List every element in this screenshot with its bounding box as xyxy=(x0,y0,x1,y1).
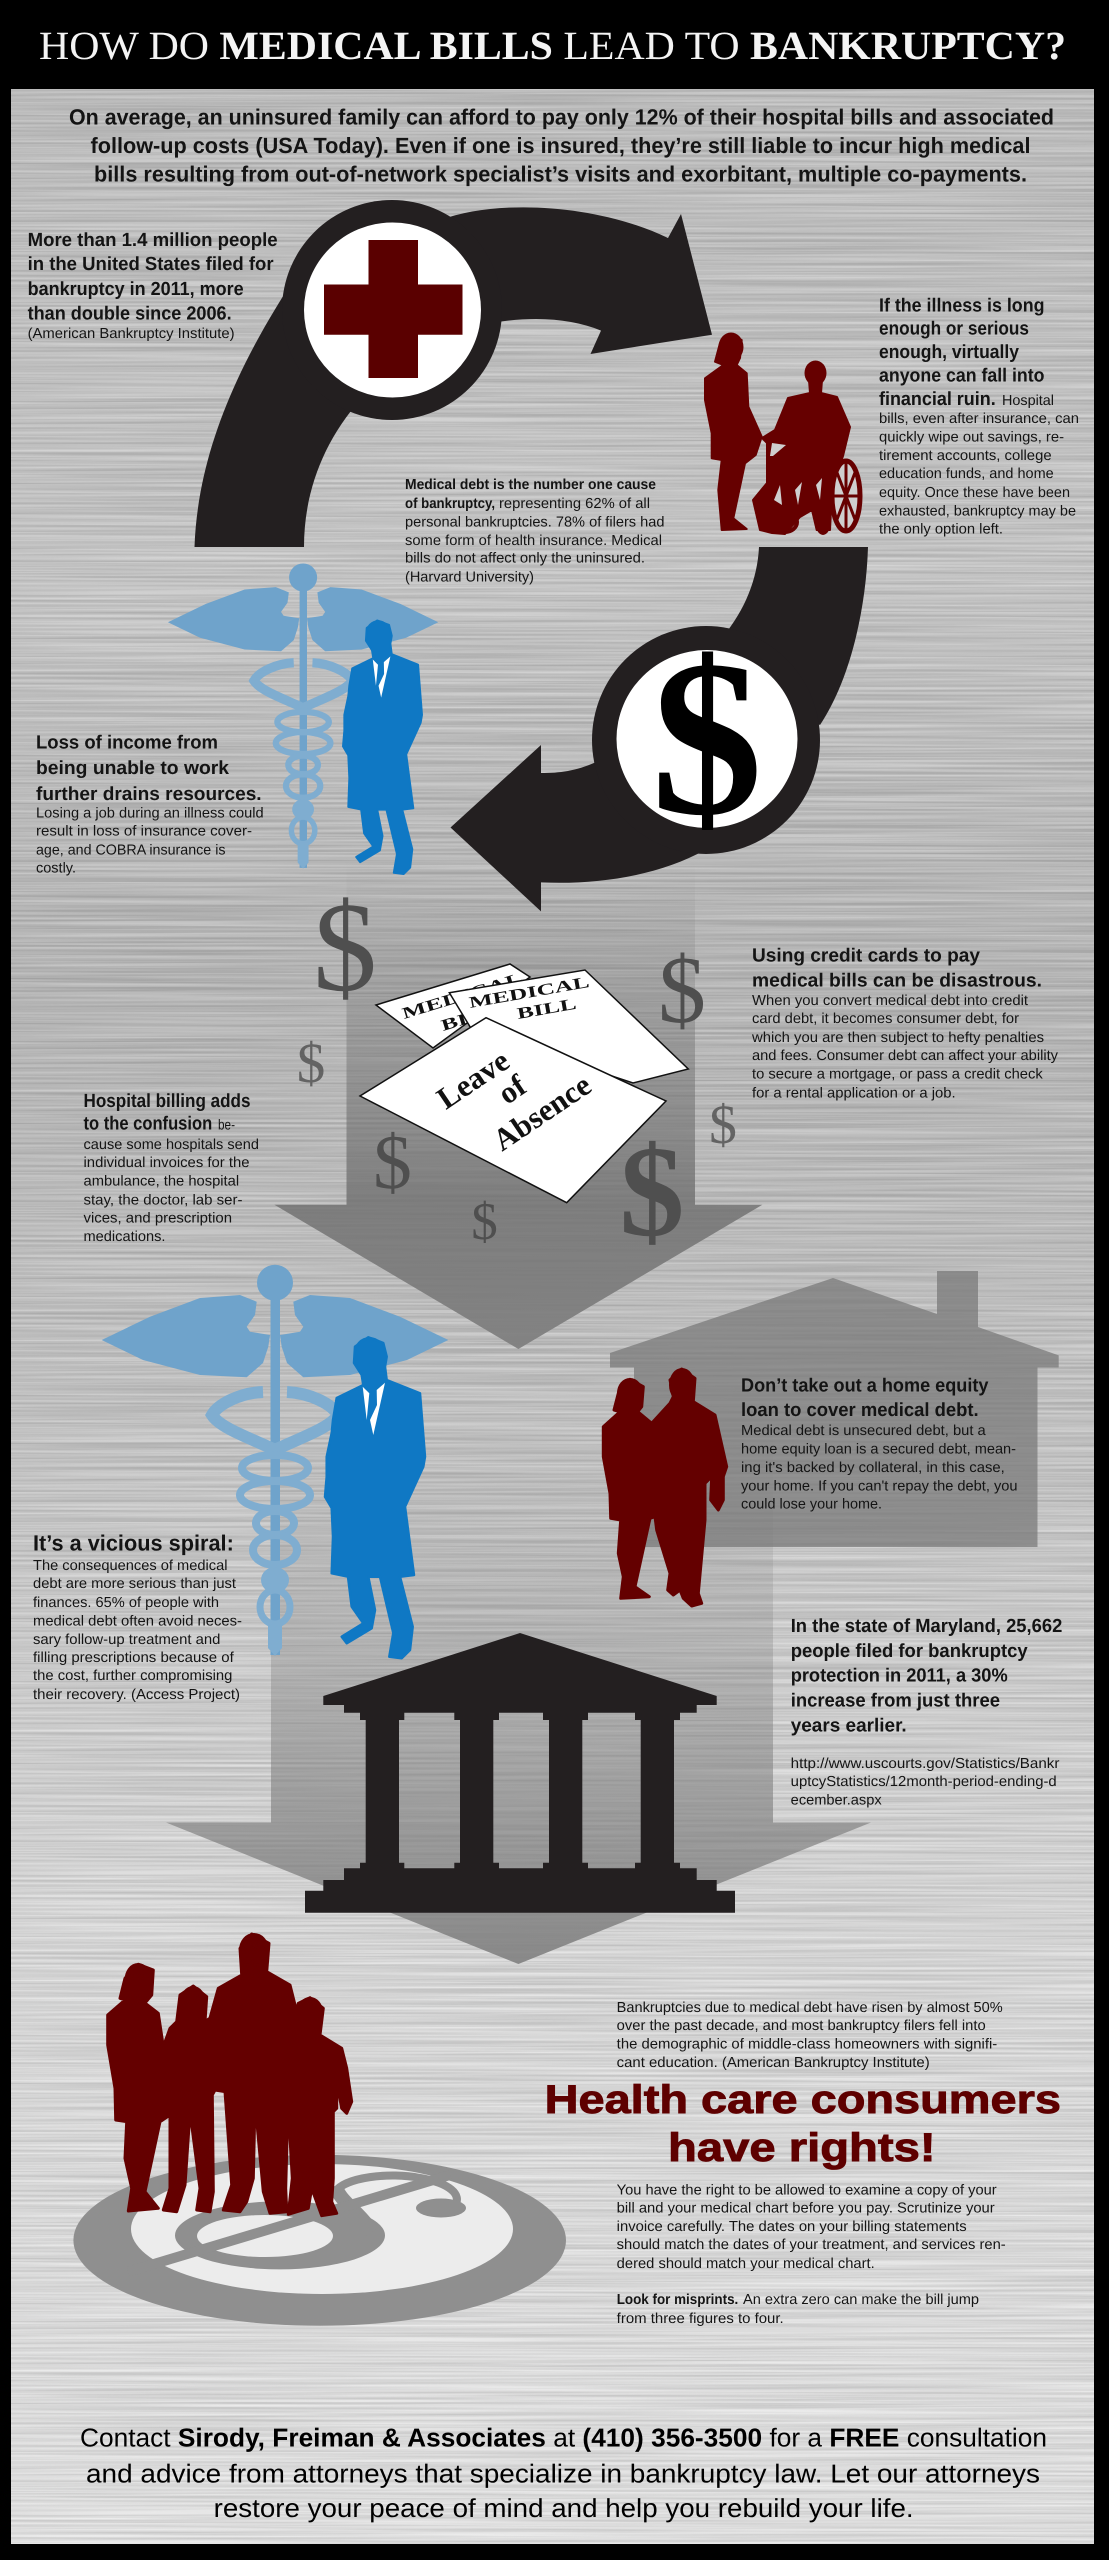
text: loss of income: costly. xyxy=(36,861,76,877)
text: hospital billing: be- xyxy=(218,1118,235,1134)
text: illness financial ruin: bills, even after insurance, can xyxy=(879,411,1079,427)
icon: small man in blue coat xyxy=(343,620,422,874)
text: illness financial ruin: quickly wipe out savings, re- xyxy=(879,430,1064,446)
text: home equity xyxy=(741,1375,1018,1512)
text: vicious spiral: The consequences of medical xyxy=(33,1558,228,1574)
text: hospital billing: Hospital billing adds xyxy=(84,1091,250,1112)
scattered gray dollar signs xyxy=(297,876,737,1264)
text: credit cards: When you convert medical debt into credit xyxy=(752,993,1028,1009)
text: vicious spiral: sary follow-up treatment and xyxy=(33,1632,220,1648)
icon: red cross xyxy=(304,222,481,398)
front medical bill: BILL xyxy=(516,996,578,1023)
gray down arrow 2 xyxy=(166,1420,871,1964)
leave of absence form: of xyxy=(491,1067,533,1111)
leave of absence form xyxy=(360,1018,666,1203)
text: illness financial ruin: enough, virtually xyxy=(879,342,1019,363)
back medical bill xyxy=(376,964,530,1048)
text: hospital billing xyxy=(84,1091,259,1245)
intro text block: follow-up costs (USA Today). Even if one is insured, they’re still liable to incur high medical xyxy=(90,133,1030,158)
text: credit cards: medical bills can be disastrous. xyxy=(752,970,1042,991)
text: bankruptcies risen: cant education. (American Bankruptcy Institute) xyxy=(617,2055,930,2071)
curved arrow with dollar medallion xyxy=(450,547,868,911)
text: number one cause: some form of health insurance. Medical xyxy=(405,533,662,549)
text: credit cards: which you are then subject to hefty penalties xyxy=(751,1030,1044,1046)
scattered gray dollar signs: $ xyxy=(471,1193,498,1251)
text: 1.4 million filed: than double since 2006. xyxy=(28,304,232,325)
text: home equity: home equity loan is a secured debt, mean- xyxy=(741,1441,1016,1457)
text: loss of income: age, and COBRA insurance is xyxy=(36,843,226,859)
icon: house xyxy=(610,1271,1059,1547)
contact call to action: restore your peace of mind and help you rebuild your life. xyxy=(214,2493,914,2523)
intro text block: On average, an uninsured family can afford to pay only 12% of their hospital bills and associated xyxy=(69,104,1054,130)
text: number one cause: (Harvard University) xyxy=(405,570,534,586)
text: bankruptcies risen: Bankruptcies due to medical debt have risen by almost 50% xyxy=(617,2000,1003,2016)
text: illness financial ruin: anyone can fall into xyxy=(879,366,1044,387)
text: home equity: your home. If you can't repay the debt, you xyxy=(741,1479,1018,1495)
text: vicious spiral: finances. 65% of people with xyxy=(33,1595,219,1611)
text: home equity: Don’t take out a home equity xyxy=(741,1375,989,1396)
text: hospital billing: vices, and prescription xyxy=(84,1211,232,1227)
text: hospital billing: stay, the doctor, lab ser- xyxy=(84,1193,243,1209)
text: your rights: invoice carefully. The dates on your billing statements xyxy=(617,2219,967,2235)
gray down arrow 1 xyxy=(274,863,762,1349)
text: illness financial ruin xyxy=(879,295,1079,538)
text: bankruptcies risen: over the past decade, and most bankruptcy filers fell into xyxy=(617,2018,986,2034)
text: home equity: ing it's backed by collateral, in this case, xyxy=(741,1460,1005,1476)
leave of absence form: Leave xyxy=(430,1043,515,1116)
icon: large man in blue coat xyxy=(325,1337,425,1658)
text: 1.4 million filed: bankruptcy in 2011, more xyxy=(28,279,244,300)
text: illness financial ruin: If the illness is long xyxy=(879,295,1044,316)
text: credit cards xyxy=(751,945,1059,1102)
text: home equity: Medical debt is unsecured debt, but a xyxy=(741,1423,987,1439)
text: Maryland: uptcyStatistics/12month-period-ending-d xyxy=(791,1774,1057,1790)
text: vicious spiral: the cost, further compromising xyxy=(33,1668,232,1684)
scattered gray dollar signs: $ xyxy=(373,1119,412,1205)
text: illness financial ruin: education funds, and home xyxy=(879,466,1054,482)
text: illness financial ruin: enough or serious xyxy=(879,319,1029,340)
papers: medical bills and leave of absence xyxy=(360,964,688,1203)
text: number one cause: bills do not affect only the uninsured. xyxy=(405,550,645,566)
text: 1.4 million filed: (American Bankruptcy Institute) xyxy=(28,326,235,342)
text: vicious spiral: It’s a vicious spiral: xyxy=(33,1530,234,1556)
text: loss of income: Loss of income from xyxy=(36,732,218,754)
back medical bill: BILL xyxy=(439,1001,502,1035)
text: illness financial ruin: Hospital xyxy=(1002,393,1054,409)
icon: dollar sign xyxy=(616,615,798,862)
text: number one cause: personal bankruptcies. 78% of filers had xyxy=(405,514,664,530)
icon: family silhouette xyxy=(108,1933,352,2216)
text: Maryland: people filed for bankruptcy xyxy=(791,1641,1028,1662)
scattered gray dollar signs: $ xyxy=(297,1032,325,1095)
icon: courthouse xyxy=(305,1633,735,1913)
icon: large caduceus xyxy=(102,1265,448,1656)
text: your rights: bill and your medical chart before you pay. Scrutinize your xyxy=(617,2201,995,2217)
text: illness financial ruin: the only option left. xyxy=(879,522,1003,538)
text: your rights: You have the right to be allowed to examine a copy of your xyxy=(617,2182,997,2198)
back medical bill: MEDICAL xyxy=(400,970,525,1023)
text: 1.4 million filed: in the United States filed for xyxy=(28,254,274,275)
front medical bill: MEDICAL xyxy=(468,974,591,1012)
text: illness financial ruin: exhausted, bankruptcy may be xyxy=(879,504,1076,520)
curved arrow with red cross medallion xyxy=(194,200,712,547)
scattered gray dollar signs: $ xyxy=(658,936,706,1043)
text: your rights: Look for misprints. xyxy=(617,2292,738,2308)
text: hospital billing: cause some hospitals send xyxy=(84,1137,259,1153)
text: loss of income: Losing a job during an illness could xyxy=(36,806,264,822)
text: loss of income: result in loss of insurance cover- xyxy=(36,824,252,840)
icon: woman and man in wheelchair xyxy=(705,332,860,535)
text: bankruptcies risen: the demographic of middle-class homeowners with signifi- xyxy=(617,2037,997,2053)
text: number one cause: of bankruptcy, xyxy=(405,496,495,512)
icon: dollar sign: $ xyxy=(651,615,763,862)
contact call to action: Contact Sirody, Freiman & Associates at (410) 356-3500 for a FREE consultation xyxy=(80,2422,1047,2452)
text: Maryland: ecember.aspx xyxy=(791,1793,882,1809)
intro text block: bills resulting from out-of-network specialist’s visits and exorbitant, multiple co-payments. xyxy=(94,162,1027,187)
text: illness financial ruin: equity. Once these have been xyxy=(879,485,1070,501)
heading: health care consumers have rights: have rights! xyxy=(668,2126,936,2170)
text: Maryland xyxy=(791,1616,1062,1809)
scattered gray dollar signs: $ xyxy=(620,1120,684,1264)
text: hospital billing: to the confusion xyxy=(84,1114,212,1135)
text: home equity: loan to cover medical debt. xyxy=(741,1400,979,1421)
text: credit cards: for a rental application or a job. xyxy=(752,1086,956,1102)
text: hospital billing: medications. xyxy=(84,1229,166,1245)
leave of absence form: Absence xyxy=(486,1067,597,1158)
text: Maryland: http://www.uscourts.gov/Statistics/Bankr xyxy=(791,1756,1060,1772)
text: home equity: could lose your home. xyxy=(741,1496,882,1512)
text: vicious spiral: their recovery. (Access Project) xyxy=(33,1687,240,1703)
text: Maryland: protection in 2011, a 30% xyxy=(791,1666,1008,1686)
text: vicious spiral: debt are more serious than just xyxy=(33,1576,236,1592)
intro text block xyxy=(69,104,1054,187)
text: vicious spiral: medical debt often avoid neces- xyxy=(33,1614,242,1630)
text: vicious spiral xyxy=(33,1530,242,1703)
text: credit cards: and fees. Consumer debt can affect your ability xyxy=(752,1048,1059,1064)
heading: health care consumers have rights xyxy=(545,2078,1061,2170)
text: number one cause xyxy=(405,477,664,586)
contact call to action xyxy=(80,2422,1047,2523)
text: 1.4 million filed xyxy=(28,230,278,342)
text: 1.4 million filed: More than 1.4 million people xyxy=(28,230,278,251)
text: illness financial ruin: tirement accounts, college xyxy=(879,448,1052,464)
text: your rights: from three figures to four. xyxy=(617,2311,784,2327)
icon: couple silhouette xyxy=(603,1368,727,1606)
text: Maryland: increase from just three xyxy=(791,1691,1000,1712)
text: number one cause: Medical debt is the number one cause xyxy=(405,477,656,493)
text: Maryland: years earlier. xyxy=(791,1715,907,1736)
text: loss of income: further drains resources. xyxy=(36,784,262,805)
text: your rights: should match the dates of your treatment, and services ren- xyxy=(617,2237,1006,2253)
title: HOW DO MEDICAL BILLS LEAD TO BANKRUPTCY? xyxy=(39,23,1066,68)
contact call to action: and advice from attorneys that specialize in bankruptcy law. Let our attorneys xyxy=(86,2458,1040,2488)
text: hospital billing: ambulance, the hospital xyxy=(84,1174,239,1190)
icon: small caduceus xyxy=(168,563,438,869)
icon: dollar ground medallion xyxy=(73,2155,566,2326)
text: loss of income xyxy=(36,732,264,877)
text: illness financial ruin: financial ruin. xyxy=(879,389,996,410)
text: credit cards: card debt, it becomes consumer debt, for xyxy=(752,1011,1019,1027)
text: Maryland: In the state of Maryland, 25,662 xyxy=(791,1616,1062,1637)
text: credit cards: to secure a mortgage, or pass a credit check xyxy=(752,1066,1043,1082)
scattered gray dollar signs: $ xyxy=(709,1095,737,1156)
text: loss of income: being unable to work xyxy=(36,758,229,779)
front medical bill xyxy=(449,970,688,1083)
text: number one cause: representing 62% of all xyxy=(499,496,650,512)
text: your rights: dered should match your medical chart. xyxy=(617,2256,875,2272)
scattered gray dollar signs: $ xyxy=(313,876,377,1018)
text: vicious spiral: filling prescriptions because of xyxy=(33,1650,235,1666)
text: bankruptcies risen xyxy=(617,2000,1003,2071)
text: your rights: An extra zero can make the bill jump xyxy=(743,2292,979,2308)
text: hospital billing: individual invoices for the xyxy=(84,1155,250,1171)
text: your rights xyxy=(617,2182,1006,2327)
text: credit cards: Using credit cards to pay xyxy=(752,945,980,966)
heading: health care consumers have rights: Health care consumers xyxy=(545,2078,1061,2122)
